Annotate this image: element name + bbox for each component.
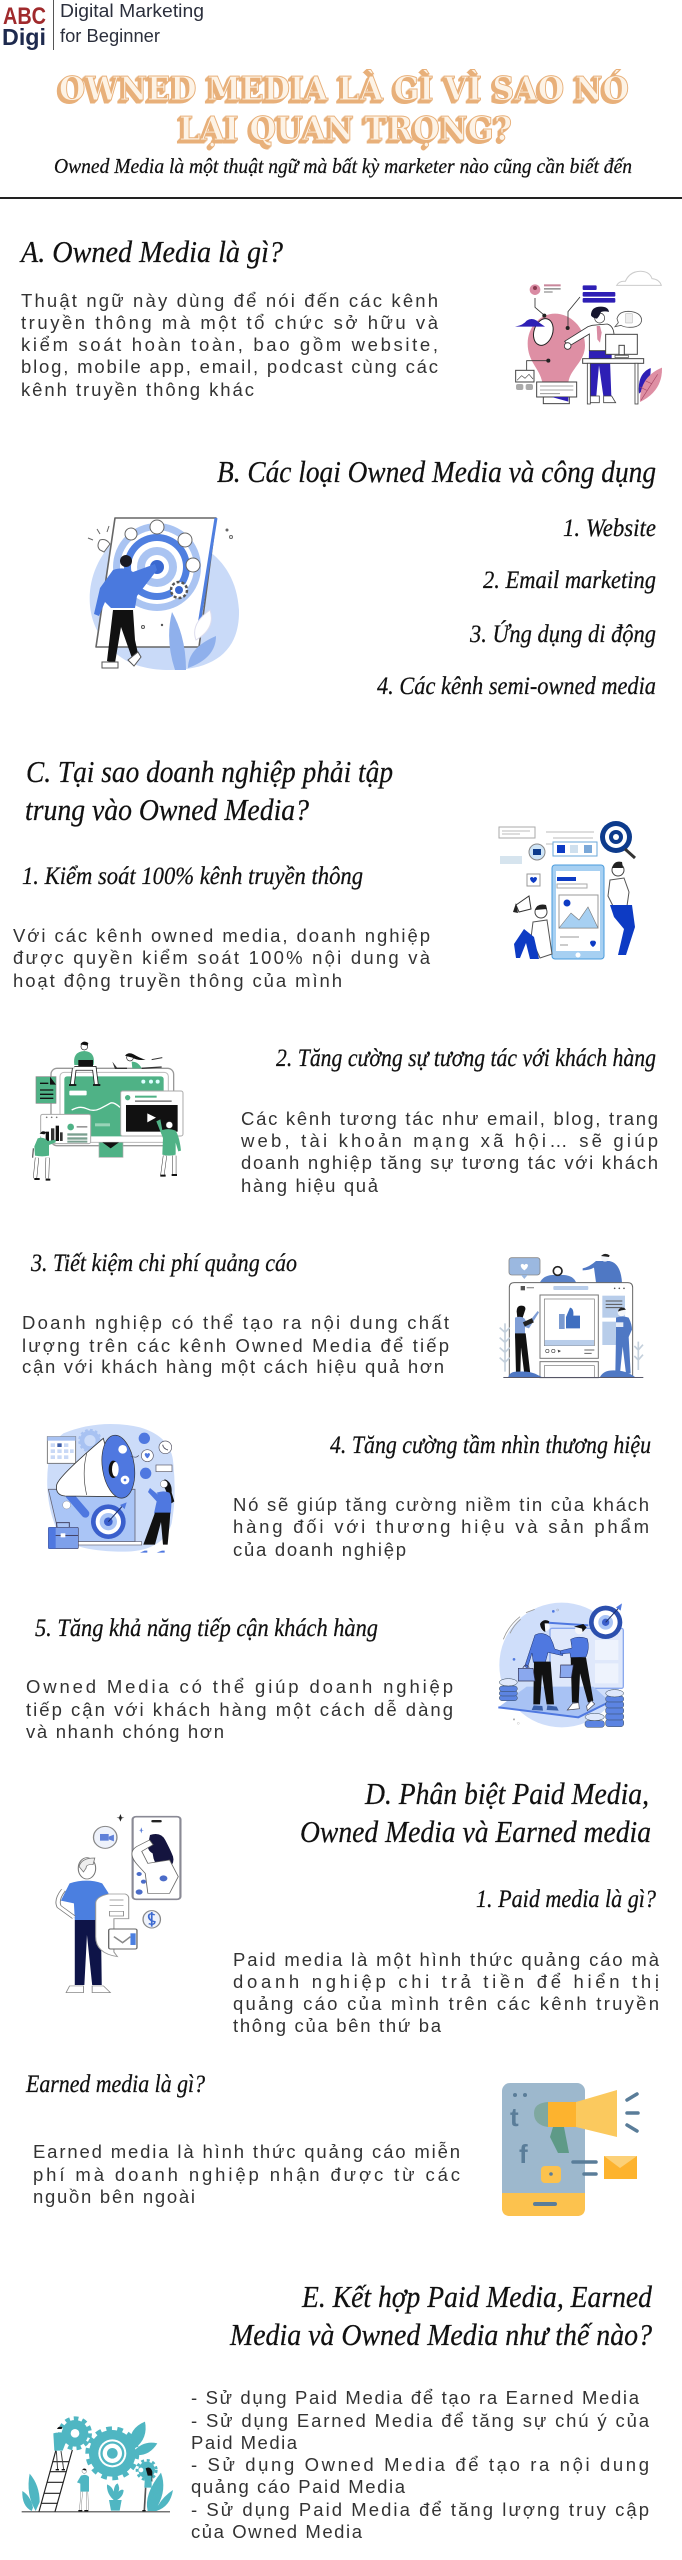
heading D: D. Phân biệt Paid Media, bbox=[364, 1776, 649, 1811]
heading E bbox=[229, 2279, 652, 2352]
text block: paid media bbox=[233, 1949, 660, 2036]
text block C5: Owned Media có thể giúp doanh nghiệp bbox=[26, 1676, 453, 1697]
subsection heading: paid media: 1. Paid media là gì? bbox=[476, 1886, 656, 1913]
icon: man with receipt and influencer phone bbox=[58, 1814, 180, 1993]
panel: C bbox=[13, 754, 658, 1742]
logo: ABC Digi Digital Marketing for Beginner: ABC bbox=[3, 3, 46, 30]
logo: ABC Digi Digital Marketing for Beginner: Digital Marketing bbox=[60, 1, 204, 21]
text block C2: web, tài khoản mạng xã hội… sẽ giúp bbox=[240, 1130, 658, 1151]
text block C4 bbox=[233, 1494, 649, 1560]
text block C2: doanh nghiệp tăng sự tương tác với khách bbox=[241, 1152, 658, 1173]
text block: earned media: nguồn bên ngoài bbox=[33, 2186, 195, 2207]
heading C: C. Tại sao doanh nghiệp phải tập bbox=[26, 754, 393, 789]
text block C1: hoạt động truyền thông của mình bbox=[13, 970, 342, 991]
icon: social post with like bbox=[500, 1254, 643, 1378]
subsection heading: earned media: Earned media là gì? bbox=[25, 2071, 205, 2098]
text block: paid media: quảng cáo của mình trên các kênh truyền bbox=[233, 1993, 659, 2014]
text block: how to combine bbox=[191, 2387, 650, 2542]
text block C3 bbox=[22, 1312, 449, 1377]
text block C2 bbox=[240, 1108, 658, 1196]
list: types of owned media: 1. Website bbox=[563, 515, 656, 542]
text block: how to combine: Paid Media bbox=[191, 2432, 298, 2453]
icon: phone promotion with megaphone bbox=[498, 821, 635, 959]
text block: paid media: Paid media là một hình thức quảng cáo mà bbox=[233, 1949, 660, 1970]
text block C5: tiếp cận với khách hàng một cách dễ dàng bbox=[26, 1699, 453, 1720]
text block C2: Các kênh tương tác như email, blog, trang bbox=[241, 1108, 658, 1129]
text block C1: được quyền kiểm soát 100% nội dung và bbox=[13, 947, 431, 968]
icon: gears with team bbox=[22, 2418, 173, 2512]
text block C3: cận với khách hàng một cách hiệu quả hơn bbox=[22, 1356, 444, 1377]
logo: ABC Digi Digital Marketing for Beginner: for Beginner bbox=[60, 26, 160, 46]
heading D bbox=[300, 1776, 651, 1849]
text block: earned media: phí mà doanh nghiệp nhận được từ các bbox=[33, 2164, 460, 2185]
panel: B bbox=[88, 454, 656, 700]
panel: D bbox=[25, 1776, 660, 2216]
icon: phone with megaphone: f bbox=[519, 2139, 528, 2169]
logo: ABC Digi Digital Marketing for Beginner: Digi bbox=[2, 24, 46, 50]
text block: paid media: thông của bên thứ ba bbox=[233, 2015, 442, 2036]
text block: earned media: Earned media là hình thức quảng cáo miễn bbox=[33, 2141, 460, 2162]
text block C1: Với các kênh owned media, doanh nghiệp bbox=[13, 925, 430, 946]
heading C bbox=[25, 754, 393, 827]
subsection heading 5: 5. Tăng khả năng tiếp cận khách hàng bbox=[35, 1615, 378, 1642]
icon: lightbulb and office worker bbox=[515, 271, 662, 404]
text block C4: Nó sẽ giúp tăng cường niềm tin của khách bbox=[233, 1494, 649, 1515]
logo: ABC Digi Digital Marketing for Beginner bbox=[2, 0, 204, 50]
icon: phone with megaphone: t bbox=[510, 2102, 519, 2132]
text block: paid media: doanh nghiệp chi trả tiền để hiển thị bbox=[233, 1971, 659, 1992]
text block C3: Doanh nghiệp có thể tạo ra nội dung chất bbox=[22, 1312, 449, 1333]
list: types of owned media: 4. Các kênh semi-owned media bbox=[377, 673, 656, 700]
text block: earned media bbox=[33, 2141, 460, 2207]
heading A: A. Owned Media là gì? bbox=[19, 234, 283, 269]
text block A: kênh truyền thông khác bbox=[21, 379, 254, 400]
list: types of owned media: 2. Email marketing bbox=[483, 567, 656, 594]
text block C5 bbox=[26, 1676, 453, 1742]
text block C2: hàng hiệu quả bbox=[241, 1175, 379, 1196]
icon: handshake and target bbox=[498, 1603, 624, 1727]
text block: how to combine: của Owned Media bbox=[191, 2521, 363, 2542]
text block: how to combine: - Sử dụng Paid Media để tăng lượng truy cập bbox=[191, 2499, 649, 2520]
panel: E bbox=[22, 2279, 652, 2542]
text block: how to combine: - Sử dụng Earned Media để tăng sự chú ý của bbox=[191, 2410, 650, 2431]
subsection heading 3: 3. Tiết kiệm chi phí quảng cáo bbox=[30, 1250, 297, 1277]
text block: how to combine: - Sử dụng Owned Media để tạo ra nội dung bbox=[191, 2454, 649, 2475]
icon: green web dashboard team bbox=[33, 1042, 183, 1180]
text block: how to combine: quảng cáo Paid Media bbox=[191, 2476, 406, 2497]
icon: megaphone and target bbox=[47, 1424, 175, 1553]
text block A: blog, mobile app, email, podcast cùng các bbox=[21, 356, 438, 377]
text block A: truyền thông mà một tổ chức sở hữu và bbox=[21, 312, 439, 333]
panel: A bbox=[19, 234, 662, 404]
list: types of owned media: 3. Ứng dụng di động bbox=[469, 620, 656, 648]
text block C1 bbox=[13, 925, 431, 991]
icon: phone with megaphone bbox=[502, 2083, 638, 2216]
title: OWNED MEDIA LÀ GÌ VÌ SAO NÓ bbox=[59, 68, 629, 108]
list: types of owned media bbox=[377, 515, 656, 700]
text block: how to combine: - Sử dụng Paid Media để tạo ra Earned Media bbox=[191, 2387, 640, 2408]
icon: man pointing at target bbox=[88, 518, 239, 670]
text block C5: và nhanh chóng hơn bbox=[26, 1721, 224, 1742]
subsection heading 1: 1. Kiểm soát 100% kênh truyền thông bbox=[22, 863, 363, 890]
text block C4: hàng đối với thương hiệu và sản phẩm bbox=[233, 1516, 649, 1537]
title: LẠI QUAN TRỌNG? bbox=[179, 109, 512, 148]
text block C4: của doanh nghiệp bbox=[233, 1539, 406, 1560]
text block C3: lượng trên các kênh Owned Media để tiếp bbox=[22, 1335, 449, 1356]
text block A: kiểm soát hoàn toàn, bao gồm website, bbox=[21, 334, 438, 355]
text block A bbox=[21, 290, 439, 400]
text block A: Thuật ngữ này dùng để nói đến các kênh bbox=[21, 290, 438, 311]
heading C: trung vào Owned Media? bbox=[25, 792, 309, 827]
title bbox=[59, 68, 629, 148]
subtitle: Owned Media là một thuật ngữ mà bất kỳ marketer nào cũng cần biết đến bbox=[54, 154, 632, 178]
